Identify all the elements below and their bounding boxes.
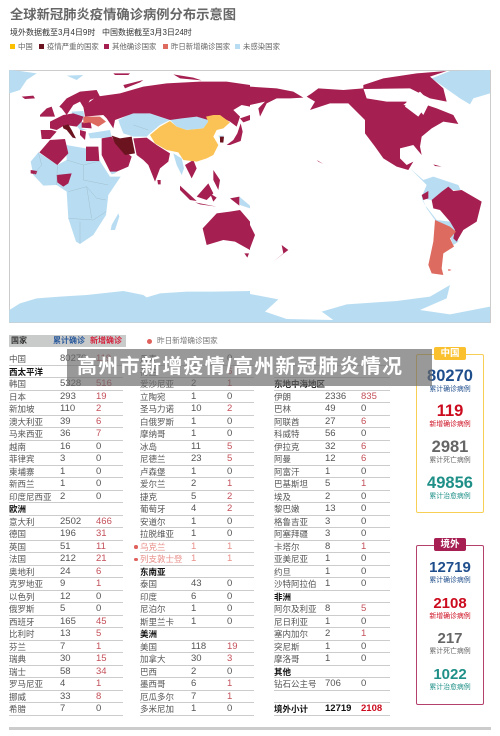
table column 1: 以色列	[9, 592, 35, 602]
china recovered	[427, 474, 473, 500]
table column 2: 118	[191, 641, 206, 652]
table column 3: 2	[325, 628, 330, 639]
table column 2	[134, 353, 254, 716]
table column 2: 5	[191, 491, 196, 502]
table column 3: 阿尔及利亚	[274, 604, 317, 614]
china	[150, 115, 230, 162]
table column 2: 美洲	[140, 629, 157, 639]
china confirmed: 80270	[427, 366, 473, 384]
table column 1: 西太平洋	[9, 367, 43, 377]
table column 1: 1	[60, 478, 65, 489]
table column 3: 东地中海地区	[274, 379, 325, 389]
table column 2: 2	[227, 503, 232, 514]
table column 2: 0	[227, 616, 232, 627]
table column 1: 21	[96, 553, 107, 564]
table column 2: 0	[227, 703, 232, 714]
table column 2: 1	[191, 603, 196, 614]
china confirmed: 累计确诊病例	[429, 386, 471, 392]
table column 2: 巴西	[140, 667, 157, 677]
table column 3: 阿富汗	[274, 467, 300, 477]
table column 3: 塞内加尔	[274, 629, 308, 639]
table column 1: 瑞典	[9, 654, 26, 664]
table column 2: 0	[227, 578, 232, 589]
table column 1: 1	[96, 678, 101, 689]
table column 3: 1	[325, 653, 330, 664]
table column 3: 伊朗	[274, 392, 291, 402]
table column 2: 0	[227, 603, 232, 614]
table column 3: 格鲁吉亚	[274, 517, 308, 527]
table column 2: 1	[191, 416, 196, 427]
panel: China totals	[416, 347, 484, 513]
data date note: 境外数据截至3月4日9时 中国数据截至3月3日24时	[10, 28, 192, 37]
table column 3: 0	[361, 403, 366, 414]
table column 1: 瑞士	[9, 667, 26, 677]
table column 1: 日本	[9, 392, 26, 402]
overseas recovered: 1022	[433, 666, 467, 682]
table column 1: 新加坡	[9, 404, 35, 414]
table column 1: 菲律宾	[9, 454, 35, 464]
table column 3: 2	[325, 491, 330, 502]
overlay title banner: 高州市新增疫情/高州新冠肺炎情况	[77, 356, 403, 378]
table column 1: 5	[96, 628, 101, 639]
table column 3: 0	[361, 553, 366, 564]
china deaths: 累计死亡病例	[429, 456, 471, 464]
overseas new	[429, 594, 471, 620]
table column 3: 0	[361, 578, 366, 589]
table column 1: 2	[60, 491, 65, 502]
table column 3: 伊拉克	[274, 442, 300, 452]
table column 2: 1	[191, 528, 196, 539]
table column 3: 12719	[325, 703, 351, 714]
panel: overseas totals	[416, 538, 484, 705]
table column 2: 19	[227, 641, 238, 652]
overlay title banner	[67, 349, 432, 386]
table column 2: 1	[227, 541, 232, 552]
table column 2: 5	[227, 441, 232, 452]
table column 1: 36	[60, 428, 71, 439]
table column 3: 亚美尼亚	[274, 554, 308, 564]
china new: 119	[437, 402, 463, 420]
table column 2: 11	[191, 441, 201, 452]
table column 2: 加拿大	[140, 654, 166, 664]
overseas deaths: 累计死亡病例	[429, 648, 471, 654]
table column 1: 9	[60, 578, 65, 589]
table column 3: 27	[325, 416, 336, 427]
table column 1: 5	[60, 603, 65, 614]
table column 2: 1	[191, 516, 196, 527]
table column 1: 45	[96, 616, 107, 627]
table column 2: 斯里兰卡	[140, 617, 174, 627]
table column 2: 2	[227, 491, 232, 502]
table column 1: 110	[60, 403, 75, 414]
table column 1: 德国	[9, 529, 26, 539]
table column 2: 卢森堡	[140, 467, 166, 477]
table column 1: 越南	[9, 442, 26, 452]
table column 2: 美国	[140, 642, 157, 652]
table column 1: 8	[96, 691, 101, 702]
table column 3: 13	[325, 503, 336, 514]
table column 3: 1	[361, 478, 366, 489]
table column 3: 1	[325, 616, 330, 627]
table column 2: 2	[227, 403, 232, 414]
table column 3	[274, 365, 390, 716]
overseas tab	[434, 538, 466, 551]
table column 2: 白俄罗斯	[140, 417, 174, 427]
overseas confirmed: 12719	[429, 558, 471, 576]
table column 1: 39	[60, 416, 71, 427]
table column 3: 56	[325, 428, 336, 439]
table column 2: 1	[191, 616, 196, 627]
map legend: 其他确诊国家	[112, 42, 156, 51]
table column 1: 7	[96, 428, 101, 439]
table column 3: 49	[325, 403, 336, 414]
table column 1: 西班牙	[9, 617, 35, 627]
table column 1: 0	[96, 491, 101, 502]
table column 1: 80270	[60, 353, 86, 364]
table column 3: 6	[361, 416, 366, 427]
table column 3: 突尼斯	[274, 642, 300, 652]
table column 1: 意大利	[9, 517, 35, 527]
china deaths	[429, 438, 471, 464]
table column 1: 挪威	[9, 692, 26, 702]
table column 3: 0	[361, 616, 366, 627]
china new	[429, 402, 471, 428]
table column 2: 2	[191, 666, 196, 677]
table column 2: 30	[191, 653, 202, 664]
table column 1: 466	[96, 516, 112, 527]
table column 1: 24	[60, 566, 71, 577]
table column 2: 0	[227, 391, 232, 402]
table column 3: 0	[361, 491, 366, 502]
table column 2: 荷兰	[140, 367, 157, 377]
table column 1: 克罗地亚	[9, 579, 43, 589]
map legend: 疫情严重的国家	[47, 42, 99, 51]
table column 1: 0	[96, 603, 101, 614]
overseas deaths	[429, 630, 471, 654]
table column 2: 捷克	[140, 492, 157, 502]
table column 2: 尼泊尔	[140, 604, 166, 614]
table column 3: 非洲	[274, 592, 291, 602]
table column 1: 31	[96, 528, 107, 539]
table column 1: 516	[96, 378, 112, 389]
table column 1: 0	[96, 703, 101, 714]
table column 2: 圣马力诺	[140, 404, 174, 414]
table column 3: 6	[361, 441, 366, 452]
table column 1: 12	[60, 591, 71, 602]
overseas tab: 境外	[440, 539, 460, 550]
table column 2: 1	[227, 678, 232, 689]
table column 3: 其他	[274, 667, 291, 677]
table column 3: 1	[361, 541, 366, 552]
table column 3: 沙特阿拉伯	[274, 579, 317, 589]
table column 2: 立陶宛	[140, 392, 166, 402]
table header bar: 累计确诊	[53, 336, 85, 345]
table column 1: 6	[96, 416, 101, 427]
table column 2: 0	[227, 353, 232, 364]
table column 2: 泰国	[140, 579, 157, 589]
table column 2: 列支敦士登	[140, 554, 183, 564]
table column 3: 阿联酋	[274, 417, 300, 427]
table column 3: 1	[325, 578, 330, 589]
table column 1: 欧洲	[9, 504, 26, 514]
table column 3: 境外小计	[274, 704, 308, 714]
table column 2: 多米尼加	[140, 704, 174, 714]
table column 1: 俄罗斯	[9, 604, 35, 614]
table column 1: 4	[60, 678, 65, 689]
table column 3: 0	[361, 566, 366, 577]
table column 2: 葡萄牙	[140, 504, 166, 514]
table column 3: 1	[325, 466, 330, 477]
table column 2: 1	[227, 553, 232, 564]
table column 3: 黎巴嫩	[274, 504, 300, 514]
table column 1: 1	[96, 641, 101, 652]
table column 3: 阿曼	[274, 454, 291, 464]
table column 3: 巴基斯坦	[274, 479, 308, 489]
map legend: 中国	[18, 42, 33, 51]
table column 1: 6	[96, 566, 101, 577]
table column 2: 尼德兰	[140, 454, 166, 464]
table column 1: 0	[96, 453, 101, 464]
table column 1: 293	[60, 391, 76, 402]
table column 3: 5	[361, 603, 366, 614]
table column 1: 中国	[9, 354, 26, 364]
table column 3: 12	[325, 453, 336, 464]
table column 3: 约旦	[274, 567, 291, 577]
severe countries	[63, 124, 224, 155]
table column 2: 1	[191, 541, 196, 552]
table column 3: 8	[325, 603, 330, 614]
table column 1: 119	[96, 353, 111, 364]
table column 1: 2502	[60, 516, 81, 527]
table column 1: 7	[60, 703, 65, 714]
table column 2: 丹麦	[140, 354, 157, 364]
table column 3: 3	[325, 516, 330, 527]
table column 2: 6	[227, 366, 232, 377]
china tab	[434, 347, 466, 360]
table column 2: 1	[191, 428, 196, 439]
map legend: 未感染国家	[243, 42, 280, 51]
table column 2: 0	[227, 416, 232, 427]
overseas new: 新增确诊病例	[429, 612, 471, 620]
table column 2: 印度	[140, 592, 157, 602]
table column 2: 0	[227, 528, 232, 539]
table column 2: 0	[227, 666, 232, 677]
china recovered: 累计治愈病例	[429, 492, 471, 500]
table column 1: 3	[60, 453, 65, 464]
table column 2: 23	[191, 453, 202, 464]
table column 1: 印度尼西亚	[9, 492, 52, 502]
table column 2: 6	[191, 591, 196, 602]
table column 1: 0	[96, 478, 101, 489]
table column 1: 2	[96, 403, 101, 414]
table column 3: 0	[361, 503, 366, 514]
table column 3: 0	[361, 641, 366, 652]
map west half: Europe, Africa, Asia, Australia	[9, 70, 250, 322]
table column 3: 巴林	[274, 404, 291, 414]
title: 全球新冠肺炎疫情确诊病例分布示意图	[10, 7, 236, 22]
table column 1: 韩国	[9, 379, 26, 389]
map legend	[10, 42, 280, 51]
table column 1: 19	[96, 391, 107, 402]
table column 3: 0	[361, 528, 366, 539]
overseas recovered: 累计治愈病例	[429, 684, 471, 690]
table column 3: 科威特	[274, 429, 300, 439]
table column 2: 3	[227, 653, 232, 664]
table column 2: 安道尔	[140, 517, 166, 527]
table column 1: 30	[60, 653, 71, 664]
table column 2: 2	[191, 478, 196, 489]
table column 1: 比利时	[9, 629, 35, 639]
table column 3: 阿塞拜疆	[274, 529, 308, 539]
table column 1: 法国	[9, 554, 26, 564]
map legend: 昨日新增确诊国家	[171, 42, 230, 51]
table column 3: 钻石公主号	[274, 679, 317, 689]
table column 3: 32	[325, 441, 336, 452]
table column 1: 0	[96, 441, 101, 452]
table column 1: 芬兰	[9, 642, 26, 652]
table column 1: 1	[60, 466, 65, 477]
table column 3: 5	[325, 478, 330, 489]
table column 2: 1	[191, 553, 196, 564]
map east half: Americas, Pacific	[250, 70, 490, 322]
table header bar	[9, 335, 126, 347]
table column 2: 0	[227, 591, 232, 602]
table column 1: 34	[96, 666, 107, 677]
table column 2: 1	[227, 478, 232, 489]
table column 3: 摩洛哥	[274, 654, 300, 664]
argentina and chile	[428, 220, 456, 275]
table column 2: 东南亚	[140, 567, 166, 577]
world map	[9, 70, 491, 323]
table column 3: 0	[361, 516, 366, 527]
overseas recovered	[429, 666, 471, 690]
table column 2: 爱沙尼亚	[140, 379, 174, 389]
table column 2: 1	[191, 703, 196, 714]
table column 1: 0	[96, 466, 101, 477]
table column 3: 0	[361, 466, 366, 477]
table column 2: 冰岛	[140, 442, 157, 452]
table column 2: 0	[227, 516, 232, 527]
table column 2: 墨西哥	[140, 679, 166, 689]
table column 2: 0	[227, 428, 232, 439]
table header bar: 新增确诊	[90, 336, 122, 345]
table column 3: 8	[325, 541, 330, 552]
table column 1: 奥地利	[9, 567, 35, 577]
table column 3: 埃及	[274, 492, 291, 502]
table column 1: 196	[60, 528, 76, 539]
table column 2: 2	[191, 378, 196, 389]
table column 1: 柬埔寨	[9, 467, 35, 477]
table column 3: 1	[325, 553, 330, 564]
overseas confirmed: 累计确诊病例	[429, 576, 471, 584]
table column 1: 5328	[60, 378, 81, 389]
table column 1: 0	[96, 591, 101, 602]
table column 1: 7	[60, 641, 65, 652]
table column 1: 15	[96, 653, 107, 664]
china recovered: 49856	[427, 474, 473, 492]
table column 1: 212	[60, 553, 76, 564]
overseas deaths: 217	[437, 630, 463, 646]
table column 1: 13	[60, 628, 71, 639]
table column 2: 摩纳哥	[140, 429, 166, 439]
table column 2: 10	[191, 403, 202, 414]
table column 3: 卡塔尔	[274, 542, 300, 552]
table column 2: 拉脱维亚	[140, 529, 174, 539]
table column 1: 165	[60, 616, 76, 627]
china tab: 中国	[440, 348, 460, 359]
table legend: newly confirmed yesterday: 昨日新增确诊国家	[157, 336, 218, 345]
overseas new: 2108	[433, 594, 467, 612]
table column 3: 0	[361, 428, 366, 439]
table column 2: 7	[191, 691, 196, 702]
table column 2: 1	[227, 691, 232, 702]
table column 1: 33	[60, 691, 71, 702]
table column 1: 11	[96, 541, 106, 552]
table column 2: 5	[227, 453, 232, 464]
table header bar: 国家	[11, 336, 27, 345]
table column 2: 6	[191, 678, 196, 689]
table column 1: 英国	[9, 542, 26, 552]
china confirmed	[427, 366, 473, 392]
table column 1: 希腊	[9, 704, 26, 714]
table column 2: 爱尔兰	[140, 479, 166, 489]
table column 2: 43	[191, 578, 202, 589]
table column 2: 0	[227, 466, 232, 477]
china new: 新增确诊病例	[429, 420, 471, 428]
table column 3: 0	[361, 653, 366, 664]
table column 3: 2336	[325, 391, 346, 402]
table column 2: 3	[191, 366, 196, 377]
table column 1: 51	[60, 541, 71, 552]
table column 3: 1	[325, 641, 330, 652]
table column 1: 58	[60, 666, 71, 677]
table column 2: 4	[191, 503, 196, 514]
table column 3: 1	[361, 628, 366, 639]
table column 1: 澳大利亚	[9, 417, 43, 427]
table column 3: 0	[361, 678, 366, 689]
table column 2: 1	[191, 391, 196, 402]
table column 1: 新西兰	[9, 479, 35, 489]
table column 3: 3	[325, 528, 330, 539]
table column 3: 706	[325, 678, 341, 689]
table column 2: 1	[227, 378, 232, 389]
table column 1	[9, 353, 123, 716]
table column 2: 乌克兰	[140, 542, 166, 552]
table column 2: 厄瓜多尔	[140, 692, 174, 702]
table column 3: 6	[361, 453, 366, 464]
table column 3: 835	[361, 391, 377, 402]
table column 3: 2108	[361, 703, 382, 714]
table column 1: 罗马尼亚	[9, 679, 43, 689]
table column 3: 尼日利亚	[274, 617, 308, 627]
table column 2: 1	[191, 466, 196, 477]
china deaths: 2981	[432, 438, 468, 456]
overseas confirmed	[429, 558, 471, 584]
table column 1: 1	[96, 578, 101, 589]
table column 3: 1	[325, 566, 330, 577]
table column 1: 马来西亚	[9, 429, 43, 439]
table column 1: 16	[60, 441, 71, 452]
